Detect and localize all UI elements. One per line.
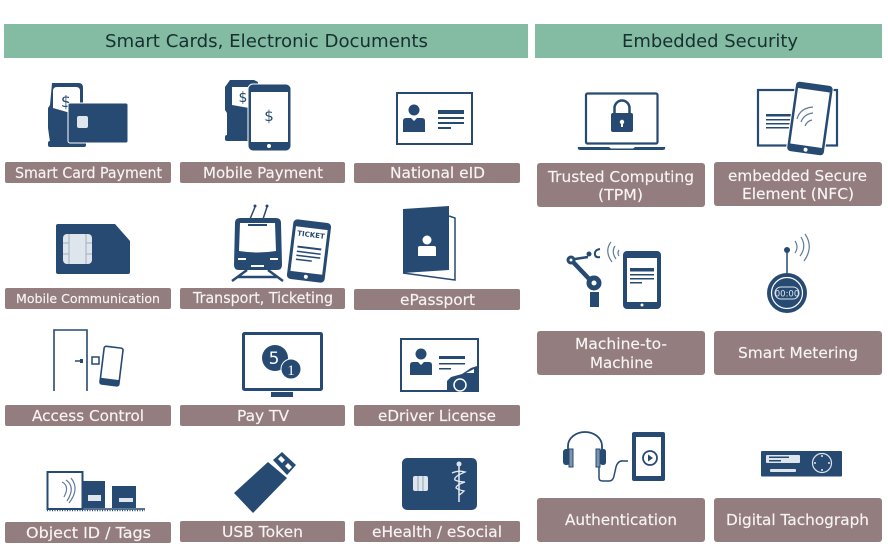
tile: USB token <box>180 452 345 542</box>
tile: eHealth and eSocial <box>354 458 520 542</box>
tile: mobile communication <box>5 224 171 309</box>
heading: smart cards <box>4 24 528 58</box>
label: eHealth and eSocial <box>354 521 520 542</box>
icon: mobile payment: $ <box>239 90 247 106</box>
icon: laptop with lock <box>578 94 665 150</box>
icon: smart card payment <box>48 83 128 147</box>
icon: smart card payment: $ <box>61 92 71 111</box>
label: eDriver license <box>354 405 520 426</box>
tile: ePassport <box>354 206 520 310</box>
label: access control <box>5 405 171 426</box>
label: authentication: Authentication <box>565 511 677 529</box>
heading: embedded security <box>535 24 882 58</box>
icon: headphones and phone <box>563 432 665 481</box>
tile: authentication <box>537 432 705 542</box>
label: eDriver license: eDriver License <box>378 407 496 425</box>
heading: embedded security: Embedded Security <box>622 31 798 52</box>
label: access control: Access Control <box>32 407 144 425</box>
icon: smart meter: 00:00 <box>775 290 799 300</box>
label: transport and ticketing: Transport, Ticketing <box>192 289 333 307</box>
label: embedded secure element: Element (NFC) <box>742 185 854 203</box>
label: trusted computing <box>537 163 705 207</box>
heading: smart cards: Smart Cards, Electronic Documents <box>105 31 428 52</box>
label: embedded secure element <box>714 162 882 206</box>
tile: digital tachograph <box>714 451 882 542</box>
label: smart metering: Smart Metering <box>738 344 858 362</box>
icon: tag reader and parcels <box>47 472 145 510</box>
label: authentication <box>537 498 705 542</box>
label: national eID <box>354 163 520 183</box>
panel: embedded security <box>535 24 882 542</box>
tile: mobile payment <box>180 80 345 183</box>
tile: object ID and tags <box>5 472 171 543</box>
label: trusted computing: Trusted Computing <box>547 168 694 186</box>
icon: TV with channel numbers <box>244 334 322 397</box>
icon: SIM card <box>56 224 130 274</box>
tile: pay TV <box>180 334 345 426</box>
label: smart metering <box>714 331 882 375</box>
tile: transport and ticketing <box>180 204 345 309</box>
icon: train and ticket phone <box>232 204 332 283</box>
label: machine to machine <box>537 331 705 375</box>
icon: mobile payment <box>225 80 291 151</box>
icon: train and ticket phone: TICKET <box>297 229 325 241</box>
label: eHealth and eSocial: eHealth / eSocial <box>372 523 502 541</box>
label: mobile communication <box>5 288 171 309</box>
icon: mobile payment: $ <box>264 107 274 125</box>
label: USB token <box>180 521 345 542</box>
label: embedded secure element: embedded Secure <box>728 167 867 185</box>
tile: trusted computing <box>537 94 705 207</box>
icon: USB stick <box>234 452 296 513</box>
label: trusted computing: (TPM) <box>598 186 643 204</box>
icon: tachograph unit <box>761 451 842 476</box>
icon: passport <box>403 206 455 280</box>
tile: smart metering <box>714 234 882 375</box>
label: mobile payment: Mobile Payment <box>203 164 323 182</box>
tile: national eID <box>354 93 520 183</box>
tile: embedded secure element <box>714 81 882 206</box>
label: USB token: USB Token <box>222 523 303 541</box>
label: pay TV: Pay TV <box>237 407 290 425</box>
tile: smart card payment <box>5 83 171 183</box>
label: pay TV <box>180 405 345 426</box>
icon: TV with channel numbers: 1 <box>287 363 295 379</box>
label: machine to machine: Machine-to- <box>575 335 667 353</box>
icon: national eID card <box>397 93 472 144</box>
icon: health card <box>402 458 477 510</box>
label: smart card payment: Smart Card Payment <box>15 164 162 182</box>
label: mobile payment <box>180 162 345 183</box>
label: machine to machine: Machine <box>590 354 653 372</box>
label: mobile communication: Mobile Communication <box>16 291 160 306</box>
icon: document and NFC phone <box>758 81 837 156</box>
icon: smart meter <box>767 234 809 313</box>
tile: machine to machine <box>537 242 705 375</box>
panel: smart cards and electronic documents <box>4 24 528 543</box>
icon: door and phone reader <box>54 330 123 391</box>
label: object ID and tags <box>5 522 171 543</box>
tile: access control <box>5 330 171 426</box>
label: ePassport: ePassport <box>400 291 475 309</box>
label: digital tachograph <box>714 498 882 542</box>
label: object ID and tags: Object ID / Tags <box>26 524 151 542</box>
icon: TV with channel numbers: 5 <box>269 349 279 369</box>
label: ePassport <box>354 289 520 310</box>
icon: robot arm and tablet <box>566 242 661 309</box>
tile: eDriver license <box>354 339 520 426</box>
label: digital tachograph: Digital Tachograph <box>726 511 869 529</box>
label: national eID: National eID <box>390 164 485 182</box>
icon: driver license with car <box>401 339 478 391</box>
